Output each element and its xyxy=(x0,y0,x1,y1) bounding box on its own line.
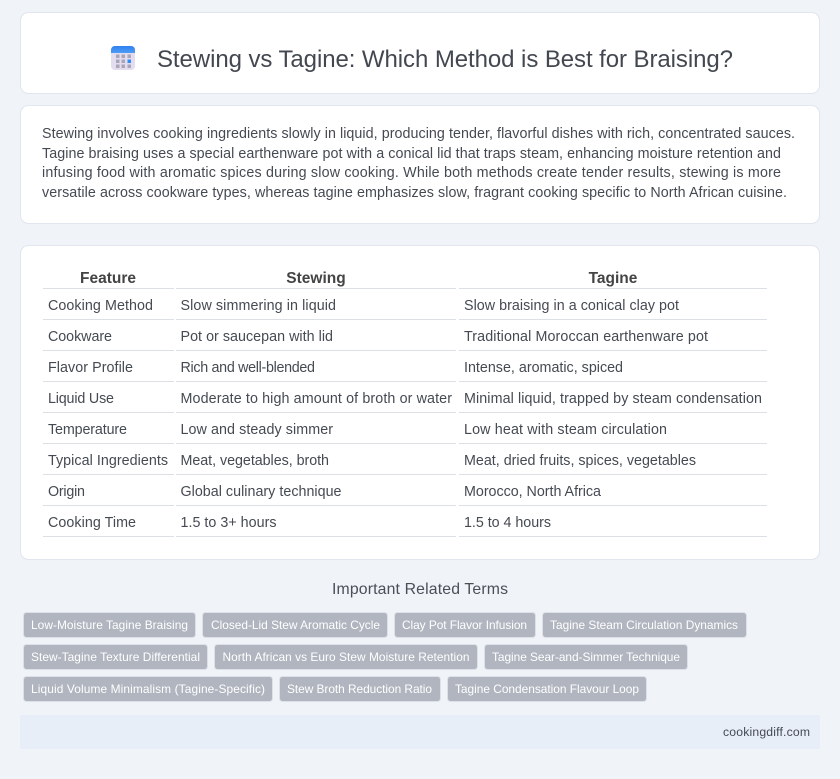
footer bar: cookingdiff.com xyxy=(723,725,810,739)
icon: calendar xyxy=(111,46,135,70)
row: cookware: Traditional Moroccan earthenware pot xyxy=(464,329,708,345)
panel: introduction xyxy=(20,106,820,224)
table header row: Tagine xyxy=(589,270,638,287)
tags: related terms: Clay Pot Flavor Infusion xyxy=(402,618,527,632)
tags: related terms: Tagine Sear-and-Simmer Technique xyxy=(492,650,680,664)
row: cooking time: 1.5 to 3+ hours xyxy=(180,515,276,531)
row: cooking time xyxy=(48,515,551,531)
row: temperature xyxy=(48,422,667,438)
tags: related terms: Stew-Tagine Texture Differential xyxy=(31,650,200,664)
text block: introduction paragraph: versatile across cookware types, whereas tagine emphasizes slow, fragrant cooking specific to North African cuisine. xyxy=(42,185,787,201)
row: liquid use xyxy=(48,391,762,407)
row: liquid use: Liquid Use xyxy=(48,391,114,407)
row: flavor profile: Intense, aromatic, spiced xyxy=(464,360,623,376)
title: Stewing vs Tagine: Which Method is Best for Braising? xyxy=(157,46,733,73)
tags: related terms xyxy=(24,612,746,702)
tags: related terms: North African vs Euro Stew Moisture Retention xyxy=(222,650,470,664)
table header row: Feature xyxy=(80,270,136,287)
row: liquid use: Minimal liquid, trapped by steam condensation xyxy=(464,391,762,407)
row: cooking time: Cooking Time xyxy=(48,515,136,531)
row: typical ingredients xyxy=(48,453,696,469)
row: origin: Origin xyxy=(48,484,85,500)
table header row: Stewing xyxy=(286,270,346,287)
row: cooking method xyxy=(48,298,679,314)
row: flavor profile: Rich and well-blended xyxy=(180,360,315,376)
panel: title header xyxy=(20,12,820,94)
row: temperature: Low and steady simmer xyxy=(180,422,333,438)
row: typical ingredients: Meat, dried fruits, spices, vegetables xyxy=(464,453,696,469)
row: cooking method: Slow simmering in liquid xyxy=(180,298,336,314)
row: origin xyxy=(48,484,601,500)
row: flavor profile: Flavor Profile xyxy=(48,360,133,376)
tags: related terms: Low-Moisture Tagine Braising xyxy=(31,618,188,632)
row: temperature: Temperature xyxy=(48,422,127,438)
row: typical ingredients: Typical Ingredients xyxy=(48,453,168,469)
text block: introduction paragraph: Stewing involves cooking ingredients slowly in liquid, producing tender, flavorful dishes with rich, concentrated sauces. xyxy=(42,126,795,142)
footer bar xyxy=(20,715,820,749)
text block: introduction paragraph xyxy=(42,126,795,201)
text block: introduction paragraph: infusing food with aromatic spices during slow cooking. While both methods create tender results, stewing is more xyxy=(42,165,781,181)
row: origin: Global culinary technique xyxy=(180,484,342,500)
row: cookware xyxy=(48,329,708,345)
tags: related terms: Tagine Steam Circulation Dynamics xyxy=(550,618,738,632)
row: cookware: Pot or saucepan with lid xyxy=(180,329,333,345)
row: cooking method: Cooking Method xyxy=(48,298,153,314)
panel: comparison table xyxy=(20,246,820,560)
row: temperature: Low heat with steam circulation xyxy=(464,422,667,438)
tags: related terms: Liquid Volume Minimalism (Tagine-Specific) xyxy=(31,682,265,696)
heading: related terms: Important Related Terms xyxy=(332,581,508,598)
text block: introduction paragraph: Tagine braising uses a special earthenware pot with a conical lid that traps steam, enhancing moisture retention and xyxy=(42,146,781,162)
row: typical ingredients: Meat, vegetables, broth xyxy=(180,453,329,469)
row: origin: Morocco, North Africa xyxy=(464,484,601,500)
row: flavor profile xyxy=(48,360,623,376)
row: cookware: Cookware xyxy=(48,329,112,345)
tags: related terms: Stew Broth Reduction Ratio xyxy=(287,682,432,696)
row: cooking method: Slow braising in a conical clay pot xyxy=(464,298,679,314)
row: cooking time: 1.5 to 4 hours xyxy=(464,515,551,531)
tags: related terms: Closed-Lid Stew Aromatic Cycle xyxy=(211,618,380,632)
row: liquid use: Moderate to high amount of broth or water xyxy=(180,391,452,407)
table header row xyxy=(80,270,638,287)
tags: related terms: Tagine Condensation Flavour Loop xyxy=(455,682,639,696)
